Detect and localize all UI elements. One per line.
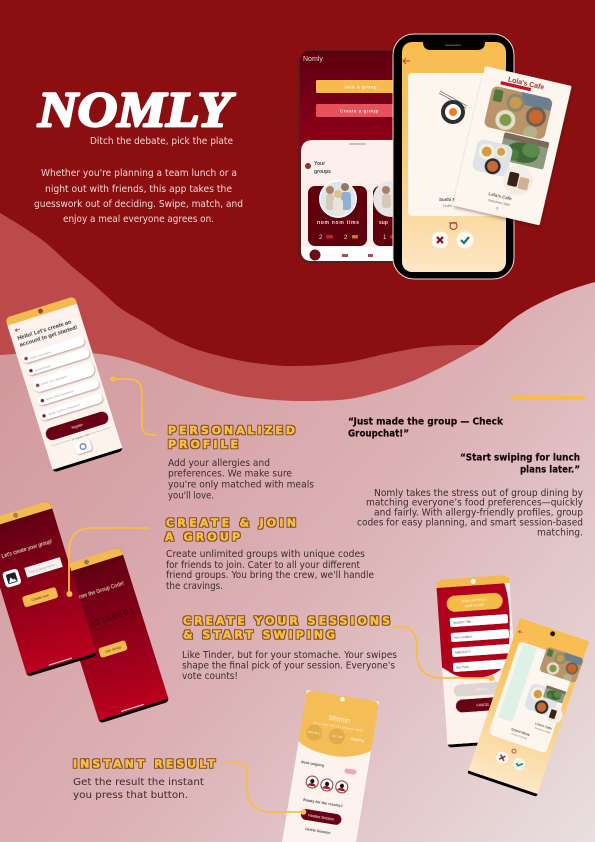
- intro text: Whether you're planning a team lunch or a: [41, 168, 237, 179]
- body: [73, 777, 204, 801]
- fields: [450, 614, 511, 672]
- summary paragraph: codes for easy planning, and smart session-based: [357, 518, 583, 528]
- fields: Set Location...: [454, 634, 475, 640]
- quote: swiping: [460, 452, 580, 476]
- accent bar: [512, 396, 585, 400]
- button: create: CREATE: [474, 687, 487, 692]
- quote: swiping: plans later.”: [520, 464, 580, 476]
- card: Lola's Cafe: Lola's Cafe: [488, 191, 513, 201]
- tagline: Ditch the debate, pick the plate: [90, 136, 233, 147]
- swipe card stack: [488, 637, 584, 755]
- panel: your groups: [301, 140, 409, 261]
- panel: your groups: Your: [314, 161, 325, 167]
- button: reject: [495, 750, 510, 765]
- heading: PERSONALIZED: [168, 424, 295, 437]
- panel: your groups: nom nom time: [317, 220, 359, 226]
- phone: groups home: Nomly: [303, 56, 323, 63]
- body: [168, 458, 314, 502]
- section: sessions: [182, 614, 397, 682]
- connector: result: [226, 762, 306, 815]
- body: [182, 650, 397, 682]
- phone: join group: [51, 547, 169, 724]
- heading: & START SWIPING: [183, 628, 335, 642]
- section: instant result: [73, 758, 215, 801]
- phone: session result: 2025-08-12: [307, 730, 322, 736]
- heading: INSTANT RESULT: [73, 758, 215, 770]
- button: accept: [512, 756, 527, 772]
- phone: session result: Delete Session: [305, 827, 331, 835]
- fields: MM/DD/YY: [455, 650, 472, 655]
- phone: session result: Ready for the results?: [303, 798, 344, 808]
- card: Lola's Cafe: $: [496, 206, 499, 211]
- phone: session result: Book outgoing: [301, 760, 325, 768]
- quote: group chat: “Just made the group — Check: [348, 416, 504, 428]
- body: for friends to join. Cater to all your different: [166, 560, 360, 571]
- button: create now: [22, 587, 58, 608]
- phone: join group: Join Group: [104, 645, 122, 654]
- swipe card stack: Grand Wisla: [511, 727, 530, 737]
- card: Lola's Cafe: [453, 66, 572, 225]
- phone: create account: account to get started!: [19, 325, 79, 349]
- button: create a group: Create a group: [340, 108, 379, 114]
- body: preferences. We make sure: [168, 468, 292, 480]
- phone: join group: Enter the Group Code!: [75, 581, 125, 602]
- panel: your groups: 2: [344, 235, 348, 241]
- panel: your groups: sup: [379, 220, 388, 226]
- phone: join group: 132160691: [82, 605, 137, 631]
- body: you'll love.: [168, 490, 214, 502]
- connector: profile: [110, 376, 157, 435]
- button: create a group: [316, 104, 401, 117]
- phone: session result: Shonin: [328, 715, 350, 725]
- button: create: [453, 681, 507, 697]
- register button: [44, 410, 110, 442]
- hero phones: [298, 34, 572, 279]
- swipe card: sushi: Sushi P: [439, 197, 456, 202]
- swipe card stack: Grand Central: [511, 731, 528, 741]
- wave: mid red: [0, 213, 595, 420]
- quote: group chat: Groupchat!”: [348, 428, 409, 440]
- phone: session form: [436, 575, 521, 748]
- button: create now: Create now: [31, 593, 50, 602]
- body: shape the final pick of your session. Everyone's: [182, 660, 395, 672]
- heading: CREATE YOUR SESSIONS: [183, 614, 390, 628]
- summary paragraph: Nomly takes the stress out of group dining by: [374, 488, 583, 499]
- body: you press that button.: [73, 790, 188, 801]
- connector: session: [392, 627, 494, 681]
- icon: sushi: [439, 91, 467, 124]
- card: Lola's Cafe: Tampines Mall: [487, 198, 510, 207]
- swipe card: sushi: Huffle: [443, 204, 452, 208]
- body: you're only matched with meals: [168, 480, 314, 490]
- pill: when and where: When and Where: [462, 597, 488, 603]
- panel: your groups: 2: [319, 235, 323, 241]
- phone: create account: [5, 296, 123, 473]
- swipe card stack: Tampines Mall: [534, 725, 551, 735]
- swipe card stack: Lola's Cafe: [535, 722, 553, 731]
- pill: when and where: [446, 592, 503, 612]
- input: group name: [24, 557, 63, 578]
- body: Like Tinder, but for your stomache. Your swipes: [182, 650, 397, 661]
- body: Add your allergies and: [168, 458, 270, 469]
- connector: group: [66, 528, 149, 597]
- heading: PROFILE: [168, 438, 238, 451]
- icon: image: [2, 568, 22, 588]
- body: Get the result the instant: [73, 777, 204, 788]
- section: create and join: [165, 516, 374, 592]
- card: Lola's Cafe: Lola's Cafe: [507, 77, 545, 92]
- form fields: Enter Username: [30, 350, 52, 360]
- google button: [74, 438, 92, 455]
- button: cancel: [455, 696, 510, 713]
- title: NOMLY: [37, 81, 236, 137]
- swipe card: sushi: [408, 73, 505, 216]
- summary paragraph: and fairly. With allergy-friendly profiles, group: [374, 508, 583, 518]
- intro text: guesswork out of deciding. Swipe, match, and: [34, 199, 243, 210]
- icon: phone: [449, 223, 457, 230]
- form fields: Enter your allergy(s): [41, 374, 68, 386]
- summary paragraph: matching.: [537, 528, 583, 538]
- intro text: [34, 168, 243, 225]
- avatars: [305, 775, 349, 794]
- heading: A GROUP: [165, 530, 240, 544]
- phone: create group: Let's create your group!: [1, 539, 53, 560]
- phone: session result: 101 Jn Paya, Blok 125, Singapore 35021: [313, 720, 364, 733]
- body: [166, 549, 374, 592]
- phone: session result: 10:17 AM: [331, 734, 343, 739]
- phone: create group: [0, 501, 97, 677]
- wave: pale pink: [0, 282, 595, 842]
- quote: swiping: “Start swiping for lunch: [460, 452, 580, 464]
- intro text: enjoy a meal everyone agrees on.: [63, 214, 214, 225]
- form fields: Enter Email: [34, 364, 51, 372]
- fields: Set Time...: [456, 665, 472, 670]
- icon: phone: [511, 749, 517, 754]
- heading: CREATE & JOIN: [166, 516, 296, 530]
- section: personalized profile: [168, 424, 314, 502]
- heading: [165, 516, 296, 544]
- phone: session swipe: [467, 618, 590, 797]
- form fields: Enter New Password: [46, 389, 74, 401]
- pill: when and where: shall we eat?: [465, 603, 485, 608]
- heading: [183, 614, 390, 642]
- quote: group chat: [348, 416, 504, 440]
- panel: your groups: 1: [383, 235, 387, 241]
- phone: session result: [279, 690, 379, 842]
- button: reject: [432, 232, 448, 248]
- body: friend groups. You bring the crew, we'll handle: [166, 570, 374, 581]
- button: join a group: Join a group: [344, 84, 377, 90]
- button: finalize session: Finalize Session: [308, 813, 334, 822]
- summary paragraph: matching everyone’s food preferences—quickly: [366, 498, 583, 508]
- button: join a group: [316, 80, 401, 93]
- phone: groups home: [298, 50, 409, 264]
- phone: create account: Hello! Let's create an: [17, 319, 73, 342]
- intro text: night out with friends, this app takes the: [45, 184, 232, 195]
- phone: session result: Ongoing: [351, 737, 365, 743]
- button: accept: [456, 232, 474, 248]
- wave: dark top: [0, 0, 595, 366]
- summary paragraph: [357, 488, 583, 538]
- phone: create account: or register with: [71, 432, 90, 442]
- form fields: Enter Confirm Password: [48, 403, 81, 416]
- button: cancel: CANCEL: [476, 703, 490, 707]
- input: group name: Type in group name...: [28, 562, 57, 574]
- form fields: [21, 335, 105, 421]
- button: finalize session: [300, 808, 342, 826]
- register button: Register: [71, 422, 84, 430]
- phone: swipe front: [393, 34, 514, 279]
- heading: [168, 424, 295, 451]
- fields: Session Title...: [453, 619, 474, 625]
- body: vote counts!: [182, 671, 238, 682]
- body: the cravings.: [166, 581, 223, 592]
- panel: your groups: groups: [314, 169, 331, 175]
- body: Create unlimited groups with unique codes: [166, 549, 365, 560]
